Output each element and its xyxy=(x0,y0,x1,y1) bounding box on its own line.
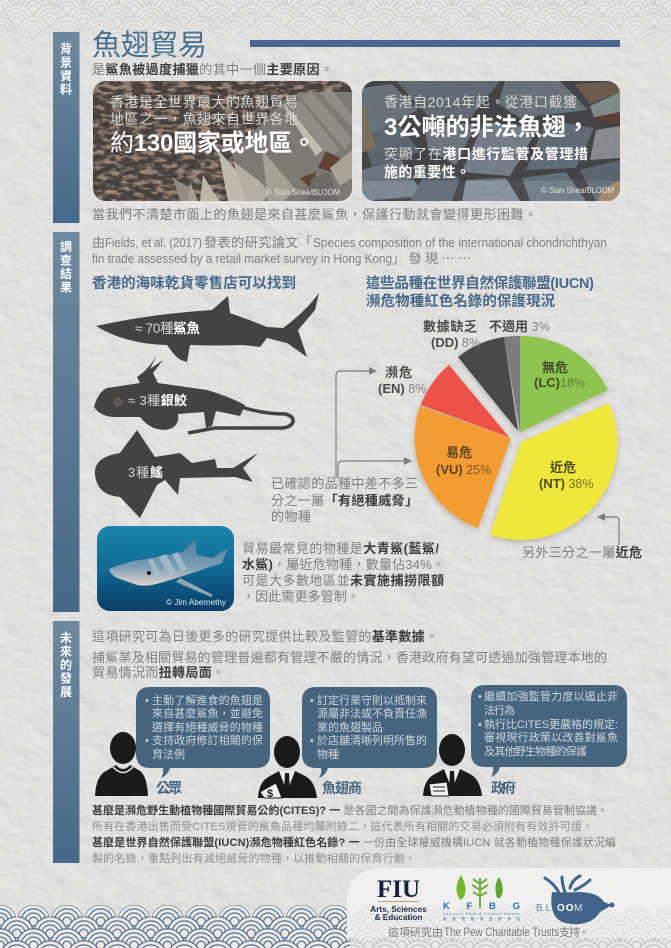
pie chart: IUCN status xyxy=(415,336,618,540)
callout: near threatened third: 另外三分之一屬近危 xyxy=(522,545,642,560)
slice: endangered xyxy=(421,365,509,437)
slice: data deficient xyxy=(458,337,518,431)
heading: IUCN status xyxy=(366,274,594,310)
speech bubble: merchant: 業的魚翅製品 xyxy=(317,720,383,734)
text: future baseline: 這項研究可為日後更多的研究提供比較及監管的基準數據。 xyxy=(92,629,438,644)
speech bubble: merchant: • xyxy=(310,735,314,747)
pie label: near threatened xyxy=(539,460,594,491)
icon: person, public xyxy=(95,732,148,796)
photo text: 3 tonnes: 3公噸的非法魚翅， xyxy=(384,114,590,141)
pie label: data deficient: (DD) 8% xyxy=(431,335,480,350)
icon: person, merchant xyxy=(258,736,317,800)
pie label: data deficient: 數據缺乏 xyxy=(423,319,477,334)
title: 魚翅貿易 xyxy=(92,29,207,62)
label: rays: 3種鰩 xyxy=(128,465,163,480)
heading: IUCN status: 瀕危物種紅色名錄的保護現況 xyxy=(366,292,556,310)
label: chimaeras: ≈ 3種銀鮫 xyxy=(128,393,187,408)
speech bubble: merchant: 物種 xyxy=(317,747,339,761)
speech bubble: merchant: 源屬非法或不負責任漁 xyxy=(317,706,427,720)
section label: findings: 調查結果 xyxy=(60,239,72,294)
logo: FIU: FIU xyxy=(377,876,420,903)
slice: not applicable xyxy=(504,336,520,432)
text: what is the IUCN red list xyxy=(92,835,616,865)
photo: blue shark xyxy=(97,526,234,611)
photo credit: © Stan Shea/BLOOM xyxy=(541,185,614,195)
text: blue shark note: 水鯊)，屬近危物種，數量佔34%。 xyxy=(242,557,445,572)
arrow: to vulnerable xyxy=(338,457,412,478)
scallop pattern: top xyxy=(0,0,671,40)
faint scallops inside footer panel xyxy=(350,905,671,938)
label: merchant: 魚翅商 xyxy=(322,780,362,796)
speech bubble: government: 法行為 xyxy=(484,703,515,717)
study introduction: 由 xyxy=(92,235,105,250)
study introduction: 」發現⋯⋯ xyxy=(392,251,471,266)
icon: person, merchant: $ xyxy=(267,788,273,800)
speech bubble: public: 育法例 xyxy=(152,747,185,761)
pie label: endangered xyxy=(378,365,426,396)
icon: person, government xyxy=(423,734,482,796)
pie label: data deficient xyxy=(423,319,480,350)
speech bubble: public xyxy=(136,687,270,778)
callout: threatened third: 已確認的品種中差不多三 xyxy=(271,476,418,491)
pie label: least concern: 無危 xyxy=(542,360,568,375)
photo text: 3 tonnes: 突顯了在港口進行監管及管理措 xyxy=(384,146,588,162)
speech bubble: government: • xyxy=(478,719,482,731)
logo: KFBG xyxy=(443,875,520,921)
text: future management: 貿易情況而扭轉局面。 xyxy=(92,665,225,680)
pie label: not applicable: 不適用 3% xyxy=(489,319,550,334)
logo: FIU xyxy=(370,876,427,922)
pie label: vulnerable: (VU) 25% xyxy=(436,462,491,477)
pie label: endangered: (EN) 8% xyxy=(378,381,426,396)
section label: background: 背景資料 xyxy=(60,41,72,96)
pie label: least concern xyxy=(534,360,585,390)
text: funding credit xyxy=(388,925,590,939)
text: what is the IUCN red list: 甚麼是世界自然保護聯盟(IUCN)瀕危物種紅色名錄? 一 一份由全球權威機構IUCN 就各動植物種保護狀況編 xyxy=(92,835,616,849)
callout: threatened third xyxy=(271,476,418,524)
label: public: 公眾 xyxy=(156,780,182,796)
speech bubble: public: • xyxy=(145,735,149,747)
photo panel: 3 tonnes illegal fins xyxy=(362,81,620,201)
slice: least concern xyxy=(520,336,608,432)
pie label: vulnerable: 易危 xyxy=(446,445,472,460)
text: funding credit: 支持。 xyxy=(559,925,590,939)
text: what is CITES: 所有在香港出售而受CITES規管的鯊魚品種均屬附錄二，這代表所有相關的交易必須附有有效許可證。 xyxy=(92,819,593,833)
section bar: background xyxy=(53,32,80,223)
speech bubble: public: 主動了解進食的魚翅是 xyxy=(152,693,263,707)
pie label: near threatened: 近危 xyxy=(550,460,576,475)
photo credit: © Jim Abernethy xyxy=(166,597,227,607)
logo: BLOOM: M xyxy=(574,903,582,914)
photo text: 130 countries: 地區之一，魚翅來自世界各地 xyxy=(110,111,298,127)
speech bubble: government xyxy=(471,685,627,777)
logo: BLOOM: BL xyxy=(536,903,554,914)
slice: near threatened xyxy=(490,403,618,540)
text: what is CITES xyxy=(92,803,608,833)
icon: ray silhouette xyxy=(95,430,258,518)
text: blue shark note: ，因此需更多管制。 xyxy=(242,589,360,604)
speech bubble: public: • xyxy=(145,695,149,707)
scallop pattern: bottom xyxy=(0,905,671,948)
speech bubble: merchant: 於店舖清晰列明所售的 xyxy=(317,733,427,747)
section bar: future xyxy=(53,621,80,863)
callout: threatened third: 分之一屬「有絕種威脅」 xyxy=(271,493,418,508)
label: government: 政府 xyxy=(491,780,516,796)
speech bubble: public: 選擇有絕種威脅的物種 xyxy=(152,720,263,734)
text: what is the IUCN red list: 製的名錄，重點列出有滅絕威脅的物種，以推動相關的保育行動。 xyxy=(92,851,416,865)
speech bubble: merchant: 訂定行業守則以抵制來 xyxy=(317,693,427,707)
icon: shark silhouette xyxy=(96,293,319,362)
pie label: endangered: 瀕危 xyxy=(385,365,412,380)
speech bubble: public: 來自甚麼鯊魚，並避免 xyxy=(152,706,263,720)
study introduction: fin trade assessed by a retail market survey in Hong Kong xyxy=(92,251,392,266)
footer logo panel xyxy=(347,868,671,940)
logo: KFBG: K F B G xyxy=(443,901,520,912)
study introduction: Species composition of the international chondrichthyan xyxy=(313,235,607,250)
photo text: 3 tonnes: 香港自2014年起，從港口截獲 xyxy=(384,94,577,110)
study introduction xyxy=(92,235,607,266)
callout: threatened third: 的物種 xyxy=(271,509,311,524)
study introduction: 發表的研究論文「 xyxy=(204,235,312,250)
arrow: to near threatened xyxy=(597,513,619,545)
photo text: 130 countries: 香港是全世界最大的魚翅貿易 xyxy=(110,94,298,110)
logo: KFBG: 嘉 道 理 農 場 暨 植 物 園 xyxy=(443,916,520,921)
logo: BLOOM: OO xyxy=(557,903,575,914)
heading: IUCN status: 這些品種在世界自然保護聯盟(IUCN) xyxy=(366,274,594,292)
text: blue shark note: 可是大多數地區並未實施捕撈限額 xyxy=(242,573,444,588)
label: sharks: ≈ 70種鯊魚 xyxy=(135,320,200,336)
photo panel: shark fins, 130 countries xyxy=(93,81,352,201)
text: funding credit: The Pew Charitable Trusts xyxy=(444,927,559,939)
section label: future: 未來的發展 xyxy=(60,630,72,699)
title rule xyxy=(250,40,620,47)
speech bubble: government: 審視現行政策以改善對鯊魚 xyxy=(484,730,618,744)
photo text: 130 countries xyxy=(110,94,316,157)
speech bubble: government: 及其他野生物種的保護 xyxy=(484,744,587,758)
icon: chimaera silhouette xyxy=(94,355,293,433)
photo text: 3 tonnes xyxy=(384,94,590,180)
logo: KFBG: Kadoorie Farm & Botanic Garden xyxy=(443,912,520,916)
speech bubble: public: 支持政府修訂相關的保 xyxy=(152,733,263,747)
text: funding credit: 這項研究由 xyxy=(388,925,443,939)
photo text: 130 countries: 約130國家或地區。 xyxy=(110,130,316,157)
section bar: findings xyxy=(53,232,80,612)
pie label: vulnerable xyxy=(436,445,491,477)
subtitle: 是鯊魚被過度捕獵的其中一個主要原因。 xyxy=(92,62,333,77)
slice: vulnerable xyxy=(415,406,511,528)
text: blue shark note: 貿易最常見的物種是大青鯊(藍鯊/ xyxy=(242,541,439,556)
speech bubble: government: • xyxy=(478,691,482,703)
arrow: to endangered xyxy=(336,367,377,478)
pie label: near threatened: (NT) 38% xyxy=(539,476,594,491)
text: blue shark note xyxy=(242,541,445,604)
logo: FIU: & Education xyxy=(375,913,422,922)
heading: found in retail shops: 香港的海味乾貨零售店可以找到 xyxy=(92,274,296,292)
speech bubble: government: 執行比CITES更嚴格的規定: xyxy=(484,717,618,731)
text: what is CITES: 甚麼是瀕危野生動植物種國際貿易公約(CITES)? 一 是各國之間為保護瀕危動植物種的國際貿易管制協議。 xyxy=(92,803,608,817)
speech bubble: government: 繼續加強監管力度以遏止非 xyxy=(484,689,618,703)
closing sentence: background: 當我們不清楚市面上的魚翅是來自甚麼鯊魚，保護行動就會變得更形困難。 xyxy=(92,207,537,222)
speech bubble: merchant: • xyxy=(310,695,314,707)
logo: FIU: Arts, Sciences xyxy=(370,905,427,914)
text: future management xyxy=(92,650,607,680)
speech bubble: merchant xyxy=(302,687,437,778)
logo: BLOOM xyxy=(536,876,614,924)
study introduction: Fields, et al. (2017) xyxy=(105,235,202,250)
pie label: least concern: (LC)18% xyxy=(534,375,585,390)
photo text: 3 tonnes: 施的重要性。 xyxy=(384,164,470,180)
photo credit: © Stan Shea/BLOOM xyxy=(266,187,340,197)
text: future management: 捕鯊業及相關貿易的管理普遍都有管理不嚴的情況，香港政府有望可透過加強管理本地的 xyxy=(92,650,607,665)
